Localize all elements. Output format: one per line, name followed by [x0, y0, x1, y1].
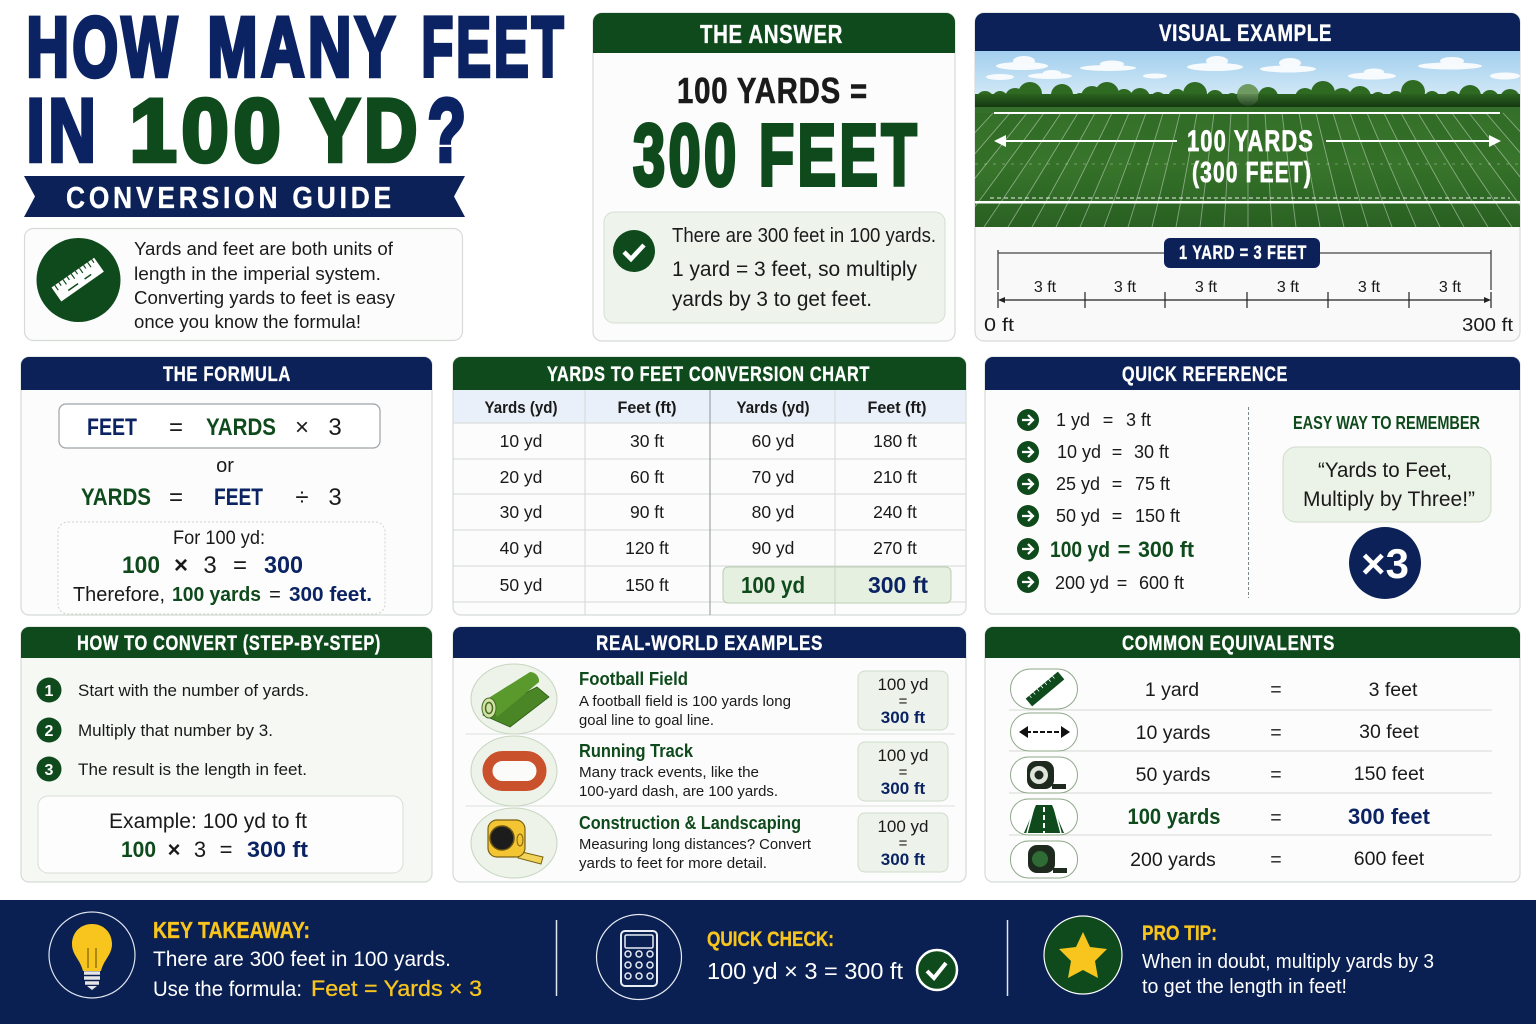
- equivalents rows: =: [1270, 764, 1282, 786]
- example box: Example: 100 yd to ft: [109, 810, 307, 833]
- panel: intro: [24, 228, 462, 340]
- worked example: For 100 yd:: [173, 528, 265, 549]
- reference list: 100 yd: [1050, 537, 1110, 562]
- example value: [858, 813, 948, 872]
- step 2: [36, 718, 273, 742]
- worked example: 300 feet.: [289, 584, 372, 606]
- example value: =: [899, 693, 908, 710]
- key takeaway: [49, 912, 482, 1001]
- measurement scale: 3 ft: [1277, 279, 1300, 296]
- formula header: [21, 357, 432, 390]
- reference list: 150 ft: [1135, 506, 1180, 526]
- reference list: 200 yd: [1055, 573, 1109, 593]
- chart table: 80 yd: [752, 502, 794, 522]
- chart table: 50 yd: [500, 575, 542, 595]
- answer note: yards by 3 to get feet.: [672, 288, 872, 311]
- example text: [579, 669, 791, 729]
- example box: [38, 796, 403, 873]
- quick check text: 100 yd × 3 = 300 ft: [707, 958, 904, 984]
- equivalents rows: =: [1270, 679, 1282, 701]
- formula 1: 3: [328, 414, 342, 441]
- formula header: THE FORMULA: [163, 363, 291, 386]
- example text: Running Track: [579, 741, 694, 761]
- steps header: [21, 627, 432, 658]
- worked example: 3: [203, 552, 217, 579]
- title: [26, 0, 566, 180]
- intro text: Yards and feet are both units of: [134, 238, 394, 259]
- example text: [579, 741, 778, 800]
- step 3: 3: [45, 762, 54, 779]
- title: 100: [130, 80, 286, 180]
- equivalents header: [985, 627, 1520, 658]
- takeaway text: Use the formula:: [153, 978, 302, 1001]
- step 2: Multiply that number by 3.: [78, 721, 273, 740]
- chart table: 30 yd: [500, 502, 542, 522]
- formula 1: FEET: [87, 414, 137, 441]
- icon: ruler: [36, 238, 120, 322]
- panel: common equivalents: [985, 627, 1520, 882]
- footer band: [0, 900, 1536, 1024]
- field arrow right: [1326, 135, 1501, 147]
- icon: arrow: [1010, 713, 1078, 751]
- reference list: 10 yd: [1057, 442, 1101, 462]
- step 1: [36, 678, 309, 702]
- example text: Measuring long distances? Convert: [579, 836, 812, 853]
- equivalents rows: =: [1270, 722, 1282, 744]
- example value: 100 yd: [877, 675, 929, 694]
- example text: goal line to goal line.: [579, 712, 714, 729]
- panel: quick reference: [985, 357, 1520, 614]
- equivalents rows: =: [1270, 807, 1282, 829]
- chart table: Feet (ft): [618, 398, 676, 417]
- measurement scale: 3 ft: [1195, 279, 1218, 296]
- measurement scale: [984, 238, 1513, 335]
- icon: check: [917, 950, 957, 990]
- panel: the formula: [21, 357, 432, 615]
- step 1: Start with the number of yards.: [78, 681, 309, 700]
- chart header: YARDS TO FEET CONVERSION CHART: [547, 363, 870, 386]
- pro tip text: to get the length in feet!: [1142, 976, 1347, 998]
- example box: =: [220, 837, 232, 862]
- remember heading: EASY WAY TO REMEMBER: [1293, 413, 1480, 433]
- title: HOW: [26, 0, 180, 94]
- visual header: [975, 13, 1520, 51]
- example value: [858, 671, 948, 730]
- title: IN: [26, 80, 100, 180]
- chart table: 30 ft: [630, 431, 664, 451]
- visual header: VISUAL EXAMPLE: [1159, 20, 1332, 47]
- reference list: [1017, 409, 1195, 593]
- formula 2: [81, 484, 342, 511]
- equivalents rows: 200 yards: [1130, 849, 1216, 871]
- chart header: [453, 357, 966, 390]
- remember quote: [1283, 447, 1491, 522]
- reference list: 75 ft: [1135, 474, 1170, 494]
- example: construction: [471, 808, 948, 878]
- field arrow left: [994, 135, 1177, 147]
- formula 2: YARDS: [81, 484, 151, 511]
- remember quote: “Yards to Feet,: [1318, 459, 1452, 482]
- field label: [1187, 125, 1314, 189]
- reference list: 300 ft: [1138, 537, 1195, 562]
- reference list: =: [1103, 410, 1113, 430]
- icon: road: [1010, 799, 1078, 835]
- equivalents header: COMMON EQUIVALENTS: [1122, 632, 1335, 655]
- chart table: Feet (ft): [868, 398, 926, 417]
- measurement scale: 0 ft: [984, 315, 1014, 335]
- chart table: 40 yd: [500, 538, 542, 558]
- reference list: 30 ft: [1134, 442, 1169, 462]
- example box: 3: [194, 837, 206, 862]
- equivalents rows: [1128, 679, 1431, 871]
- icon: ruler: [1010, 669, 1078, 709]
- icon: light bulb: [49, 912, 135, 998]
- worked example: Therefore,: [73, 584, 165, 606]
- answer value: 300 FEET: [633, 107, 920, 204]
- quick check: [596, 914, 957, 1000]
- reference header: QUICK REFERENCE: [1122, 363, 1288, 386]
- example value: =: [899, 835, 908, 852]
- pro tip text: [1142, 922, 1434, 998]
- worked example: =: [269, 584, 281, 606]
- intro text: [134, 238, 396, 332]
- chart table: 60 yd: [752, 431, 794, 451]
- icon: calculator: [596, 914, 682, 1000]
- reference header: [985, 357, 1520, 390]
- reference list: =: [1118, 537, 1130, 562]
- pro tip text: When in doubt, multiply yards by 3: [1142, 951, 1434, 973]
- steps header: HOW TO CONVERT (STEP-BY-STEP): [77, 632, 381, 655]
- chart table: Yards (yd): [484, 398, 558, 417]
- worked example: 300: [264, 552, 303, 579]
- answer header: [593, 13, 955, 53]
- equivalents rows: 600 feet: [1354, 848, 1425, 870]
- examples header: REAL-WORLD EXAMPLES: [596, 632, 823, 655]
- chart table: 180 ft: [873, 431, 917, 451]
- example text: A football field is 100 yards long: [579, 693, 791, 710]
- panel: real-world examples: [453, 627, 966, 882]
- worked example: [58, 522, 385, 614]
- example: football field: [471, 664, 948, 734]
- icon: tape measure: [1010, 841, 1078, 878]
- step 3: The result is the length in feet.: [78, 760, 307, 779]
- example value: 100 yd: [877, 746, 929, 765]
- intro text: Converting yards to feet is easy: [134, 287, 396, 308]
- equivalents rows: 3 feet: [1369, 679, 1418, 701]
- field illustration: [975, 51, 1520, 227]
- example value: [858, 742, 948, 801]
- formula 2: ÷: [295, 484, 309, 511]
- chart table: 120 ft: [625, 538, 669, 558]
- icon: tape measure: [1010, 757, 1078, 793]
- reference list: =: [1112, 442, 1122, 462]
- reference list: 50 yd: [1056, 506, 1100, 526]
- equivalents rows: 100 yards: [1128, 804, 1220, 829]
- subtitle ribbon: [24, 176, 465, 217]
- subtitle ribbon: CONVERSION GUIDE: [66, 181, 395, 216]
- step 3: [36, 756, 307, 782]
- reference list: =: [1117, 573, 1127, 593]
- formula 1: ×: [295, 414, 309, 441]
- reference list: =: [1112, 506, 1122, 526]
- intro text: once you know the formula!: [134, 311, 361, 332]
- example box: ×: [168, 837, 180, 862]
- measurement scale: 3 ft: [1114, 279, 1137, 296]
- example text: [579, 813, 812, 872]
- measurement scale: 3 ft: [1439, 279, 1462, 296]
- title: ?: [428, 80, 470, 180]
- step 2: 2: [45, 723, 54, 740]
- reference list: 1 yd: [1056, 410, 1090, 430]
- example text: Many track events, like the: [579, 764, 759, 781]
- examples header: [453, 627, 966, 658]
- measurement scale: 300 ft: [1462, 315, 1513, 335]
- chart table: 10 yd: [500, 431, 542, 451]
- equivalents rows: 1 yard: [1145, 679, 1199, 701]
- answer note: There are 300 feet in 100 yards.: [672, 225, 936, 247]
- chart table: 90 yd: [752, 538, 794, 558]
- chart table: 100 yd: [741, 572, 805, 598]
- takeaway text: Feet = Yards × 3: [311, 976, 482, 1001]
- panel: conversion chart: [453, 357, 966, 615]
- reference list: =: [1112, 474, 1122, 494]
- takeaway text: There are 300 feet in 100 yards.: [153, 948, 451, 971]
- example value: 300 ft: [881, 708, 926, 727]
- chart table: Yards (yd): [736, 398, 810, 417]
- intro text: length in the imperial system.: [134, 263, 381, 284]
- title: FEET: [422, 0, 566, 94]
- icon: star: [1044, 916, 1122, 994]
- formula 2: =: [169, 484, 183, 511]
- times three badge: ×3: [1361, 540, 1409, 587]
- example value: 300 ft: [881, 779, 926, 798]
- formula 1: [59, 404, 380, 448]
- chart table: 70 yd: [752, 467, 794, 487]
- formula 2: FEET: [214, 484, 263, 511]
- reference list: 25 yd: [1056, 474, 1100, 494]
- field label: 100 YARDS: [1187, 125, 1314, 158]
- title: YD: [310, 80, 422, 180]
- times three badge: [1349, 527, 1421, 599]
- panel: the answer: [593, 13, 955, 341]
- chart table: 20 yd: [500, 467, 542, 487]
- example value: 100 yd: [877, 817, 929, 836]
- example text: Construction & Landscaping: [579, 813, 801, 833]
- chart table: 90 ft: [630, 502, 664, 522]
- chart table: 210 ft: [873, 467, 917, 487]
- example value: =: [899, 764, 908, 781]
- step 1: 1: [45, 683, 54, 700]
- answer header: THE ANSWER: [700, 19, 843, 49]
- quick check text: QUICK CHECK:: [707, 928, 834, 951]
- panel: step by step: [21, 627, 432, 882]
- pro tip text: PRO TIP:: [1142, 922, 1217, 945]
- reference list: 3 ft: [1126, 410, 1151, 430]
- formula 1: =: [169, 414, 183, 441]
- quick check text: [707, 928, 904, 984]
- answer statement: 100 YARDS =: [677, 70, 868, 111]
- equivalents rows: 30 feet: [1359, 721, 1419, 743]
- worked example: ×: [174, 552, 188, 579]
- worked example: 100 yards: [172, 584, 261, 606]
- chart table: 240 ft: [873, 502, 917, 522]
- answer note: 1 yard = 3 feet, so multiply: [672, 258, 917, 281]
- measurement scale: 3 ft: [1358, 279, 1381, 296]
- title: MANY: [208, 0, 398, 94]
- equivalents rows: 150 feet: [1354, 763, 1425, 785]
- chart table: [453, 390, 966, 615]
- panel: visual example: [974, 12, 1520, 342]
- or: or: [216, 455, 234, 477]
- chart table: 150 ft: [625, 575, 669, 595]
- formula 1: YARDS: [206, 414, 276, 441]
- worked example: =: [233, 552, 247, 579]
- tree line: [975, 80, 1520, 109]
- example text: yards to feet for more detail.: [579, 855, 767, 872]
- takeaway text: [153, 917, 482, 1001]
- equivalents rows: 300 feet: [1348, 804, 1431, 829]
- example text: 100-yard dash, are 100 yards.: [579, 783, 778, 800]
- measurement scale: 3 ft: [1034, 279, 1057, 296]
- example box: 300 ft: [247, 837, 309, 862]
- equivalents rows: 10 yards: [1136, 722, 1211, 744]
- example: running track: [471, 736, 948, 806]
- takeaway text: KEY TAKEAWAY:: [153, 917, 310, 943]
- example value: 300 ft: [881, 850, 926, 869]
- chart table: 270 ft: [873, 538, 917, 558]
- worked example: 100: [122, 552, 160, 579]
- chart table: 60 ft: [630, 467, 664, 487]
- answer note: [604, 212, 945, 323]
- example box: 100: [121, 837, 156, 862]
- remember quote: Multiply by Three!”: [1303, 488, 1475, 511]
- example text: Football Field: [579, 669, 688, 689]
- chart table: 300 ft: [868, 572, 928, 598]
- measurement scale: 1 YARD = 3 FEET: [1179, 243, 1307, 264]
- pro tip: [1044, 916, 1434, 998]
- field label: (300 FEET): [1192, 157, 1312, 189]
- formula 2: 3: [328, 484, 342, 511]
- reference list: 600 ft: [1139, 573, 1184, 593]
- equivalents rows: =: [1270, 849, 1282, 871]
- equivalents rows: 50 yards: [1136, 764, 1211, 786]
